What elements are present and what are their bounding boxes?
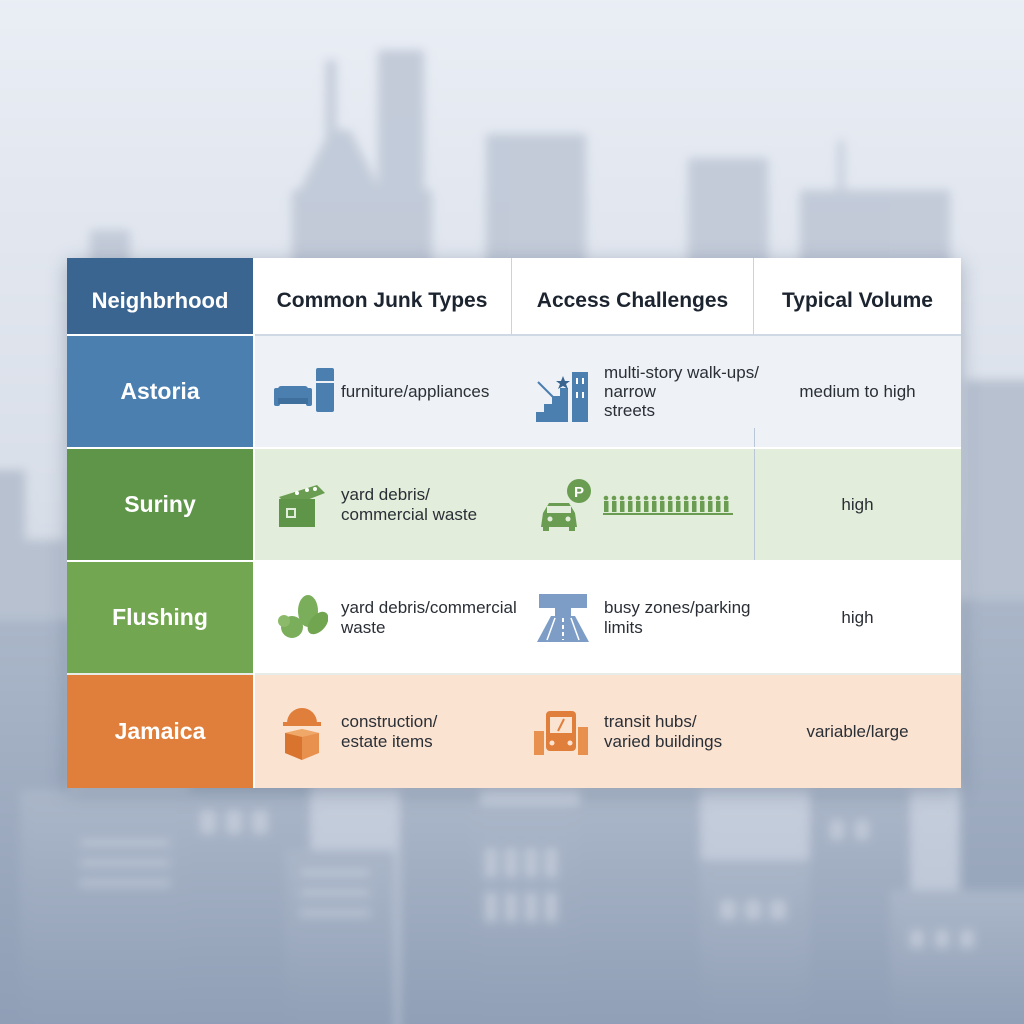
text: medium to high: medium to high (799, 382, 916, 400)
text: construction/estate items (341, 712, 438, 750)
icon: bus and buildings (534, 711, 588, 755)
label: Astoria (67, 336, 253, 447)
icon: sofa and fridge (274, 368, 334, 412)
text: multi-story walk-ups: narrow (604, 382, 656, 401)
header: Access Challenges: Access Challenges (537, 289, 728, 312)
header row (67, 258, 933, 334)
table (67, 258, 961, 788)
text: variable/large: variable/large (806, 722, 909, 740)
text: busy zones/parking limits (604, 598, 750, 636)
label: Flushing (67, 562, 253, 673)
icon: hard hat and box (283, 708, 321, 760)
text: high: high (841, 494, 874, 514)
header: Common Junk Types: Common Junk Types (277, 289, 487, 312)
label: Suriny: Suriny (124, 491, 196, 517)
text: busy zones/parking limits: busy zones/parking (604, 598, 750, 616)
icon: stairs and building (536, 372, 588, 422)
icon: dumpster (279, 485, 325, 527)
header: Neighborhood: Neighbrhood (92, 288, 228, 313)
icon: leaves (278, 595, 328, 638)
text: busy zones/parking limits: limits (604, 618, 643, 636)
label: Jamaica (67, 675, 253, 788)
icon: car with parking and crowd (541, 479, 733, 531)
text: yard debris/commercial waste (341, 484, 477, 524)
row: Flushing (67, 562, 961, 673)
text: yard debris/commercial waste: waste (341, 618, 385, 636)
text: multi-story walk-ups: streets (604, 401, 655, 420)
row: Jamaica (67, 675, 961, 788)
header: Typical Volume: Typical Volume (782, 289, 933, 312)
text: furniture/appliances: furniture/appliances (341, 382, 489, 400)
text: transit hubs/varied buildings: varied buildings (604, 732, 722, 750)
label: Suriny (67, 449, 253, 560)
icon: highway (537, 594, 589, 642)
header: Neighborhood (67, 258, 253, 334)
text: multi-story walk-ups (604, 363, 759, 420)
row: Astoria (67, 336, 961, 447)
label: Astoria: Astoria (120, 378, 200, 404)
text: high: high (841, 608, 874, 626)
text: yard debris/commercial waste (341, 598, 517, 636)
icon: car with parking and crowd: P (574, 484, 584, 501)
text: transit hubs/varied buildings: transit hubs/ (604, 712, 697, 730)
text: multi-story walk-ups: multi-story walk-ups/ (604, 363, 759, 382)
text: construction/estate items: estate items (341, 732, 433, 750)
row separators (67, 447, 961, 449)
row: Suriny (67, 449, 961, 560)
label: Jamaica: Jamaica (115, 718, 205, 744)
text: transit hubs/varied buildings (604, 712, 722, 750)
text: yard debris/commercial waste: yard debris/commercial (341, 598, 517, 616)
text: yard debris/commercial waste: commercial waste (341, 504, 477, 524)
label: Flushing: Flushing (112, 604, 208, 630)
header: Access Challenges (511, 258, 754, 334)
text: yard debris/commercial waste: yard debris/ (341, 484, 430, 504)
column divider (vertical) (754, 428, 755, 576)
text: construction/estate items: construction/ (341, 712, 437, 730)
